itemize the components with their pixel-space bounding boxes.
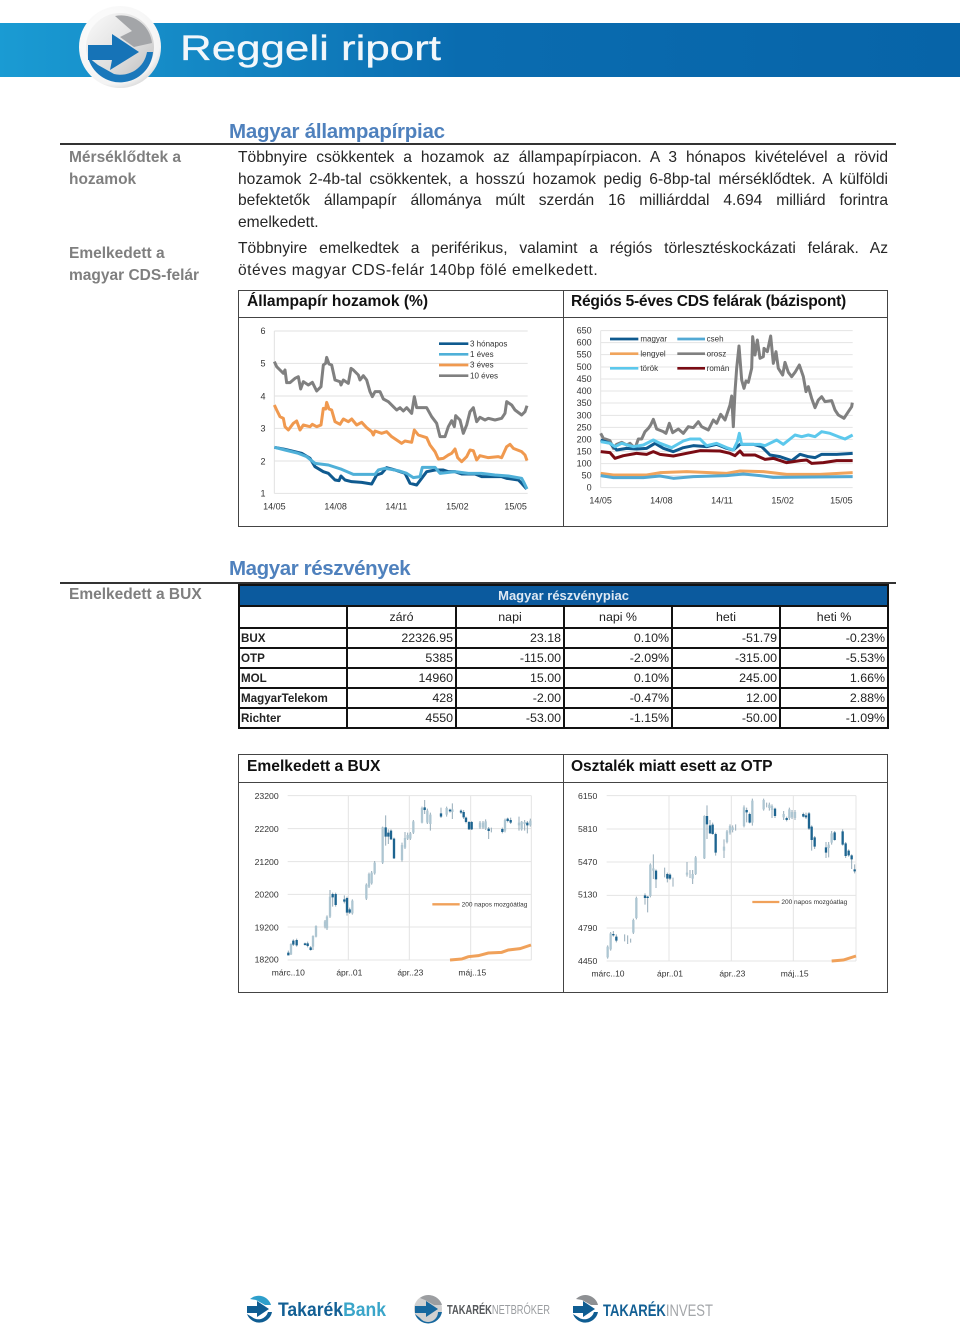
line chart: regional CDS spreads: 650 xyxy=(577,326,592,336)
table: Hungarian equity market: 15.00 xyxy=(530,671,561,685)
chart legend: yields: 10 éves xyxy=(470,371,498,380)
line chart: government bond yields: 14/08 xyxy=(324,502,347,512)
table: Hungarian equity market: -5.53% xyxy=(846,651,885,665)
heading: Magyar állampapírpiac: Magyar állampapírpiac xyxy=(229,120,445,143)
table: Hungarian equity market: 428 xyxy=(432,691,453,705)
line chart: regional CDS spreads: 400 xyxy=(577,386,592,396)
icon: main logo xyxy=(79,13,161,88)
line chart: regional CDS spreads xyxy=(576,326,854,506)
chart legend: yields: 3 hónapos xyxy=(470,339,507,348)
logo: TakarékBank xyxy=(247,1296,386,1323)
panel: stock chart frame xyxy=(238,754,888,993)
line chart: regional CDS spreads: 0 xyxy=(587,483,592,493)
candlestick chart: OTP xyxy=(578,791,856,978)
table: Hungarian equity market: -0.47% xyxy=(630,691,669,705)
table: Hungarian equity market: 0.10% xyxy=(634,671,669,685)
text block: CDS spreads: ötéves magyar CDS-felár 140bp fölé emelkedett. xyxy=(238,262,598,278)
table: Hungarian equity market: -1.15% xyxy=(630,711,669,725)
line chart: regional CDS spreads: 350 xyxy=(577,398,592,408)
candlestick chart: BUX: 21200 xyxy=(255,857,279,867)
candlestick chart: BUX: máj..15 xyxy=(458,967,487,977)
table: Hungarian equity market: heti % xyxy=(817,610,851,624)
table: Hungarian equity market: -315.00 xyxy=(735,651,777,665)
table: Hungarian equity market: 0.10% xyxy=(634,631,669,645)
chart legend: moving average: 200 napos mozgóatlag xyxy=(781,899,848,906)
chart legend: CDS: magyar xyxy=(640,335,667,344)
line chart: regional CDS spreads: 100 xyxy=(577,459,592,469)
banner title: Reggeli riport xyxy=(180,29,441,68)
line chart: government bond yields: 5 xyxy=(260,359,266,369)
line chart: government bond yields: 15/02 xyxy=(446,502,469,512)
line chart: regional CDS spreads: 200 xyxy=(577,434,592,444)
chart legend: yields: 1 éves xyxy=(470,350,494,359)
table: Hungarian equity market: napi % xyxy=(599,610,637,624)
line chart: government bond yields: 14/11 xyxy=(385,502,407,512)
table: Hungarian equity market: -115.00 xyxy=(520,651,561,665)
chart legend: yields: 3 éves xyxy=(470,361,494,370)
chart legend: yields xyxy=(439,339,507,380)
line chart: regional CDS spreads: 600 xyxy=(577,338,592,348)
line chart: regional CDS spreads: 15/05 xyxy=(830,496,853,506)
table: Hungarian equity market: -2.00 xyxy=(533,691,561,705)
chart legend: CDS xyxy=(610,335,729,373)
candlestick chart: OTP: 5810 xyxy=(578,824,597,834)
line chart: government bond yields: 15/05 xyxy=(504,502,527,512)
text block: government bonds: befektetők állampapír állománya múlt szerdán 16 milliárddal 4.694 milliárd forintra xyxy=(238,192,888,209)
candlestick chart: BUX: 19200 xyxy=(255,922,279,932)
table: Hungarian equity market: OTP xyxy=(241,652,265,664)
chart legend: CDS: orosz xyxy=(707,349,726,358)
candlestick chart: OTP: 4450 xyxy=(578,956,597,966)
side note: Emelkedett a BUX: Emelkedett a BUX xyxy=(69,586,202,603)
table: Hungarian equity market: BUX xyxy=(241,632,265,644)
table: Hungarian equity market: MagyarTelekom xyxy=(241,692,328,704)
table: Hungarian equity market xyxy=(238,584,889,729)
line chart: government bond yields: 1 xyxy=(260,489,266,499)
text block: government bonds: hozamok 2-4b-tal csökkentek, a hosszú hozamok pedig 6-8bp-tal mérséklődtek. A külföldi xyxy=(238,170,888,188)
line chart: regional CDS spreads: 550 xyxy=(577,350,592,360)
candlestick chart: BUX: 22200 xyxy=(255,824,279,834)
table: Hungarian equity market: 5385 xyxy=(425,651,453,665)
table: Hungarian equity market: napi xyxy=(498,610,522,624)
line chart: government bond yields: 14/05 xyxy=(263,502,286,512)
chart legend: CDS: cseh xyxy=(707,335,724,344)
text block: government bonds: emelkedett. xyxy=(238,214,319,230)
side note: Mérséklődtek a hozamok xyxy=(69,149,182,188)
table: Hungarian equity market: heti xyxy=(716,610,736,624)
candlestick chart: BUX: 23200 xyxy=(255,791,279,801)
candlestick chart: BUX xyxy=(255,791,532,977)
line chart: government bond yields: 3 xyxy=(260,424,266,434)
text block: government bonds: Többnyire csökkentek a hozamok az állampapírpiacon. A 3 hónapos kivételével a rövid xyxy=(238,149,888,166)
candlestick chart: OTP: 6150 xyxy=(578,791,597,801)
line chart: regional CDS spreads: 50 xyxy=(582,471,592,481)
line chart: regional CDS spreads: 14/08 xyxy=(650,496,673,506)
header banner xyxy=(0,13,960,88)
candlestick chart: OTP: máj..15 xyxy=(781,968,809,978)
logo: TakarékNetBróker xyxy=(414,1295,550,1324)
table: Hungarian equity market: 23.18 xyxy=(530,631,561,645)
line chart: regional CDS spreads: 300 xyxy=(577,410,592,420)
table: Hungarian equity market: 4550 xyxy=(425,711,453,725)
side note: Emelkedett a magyar CDS-felár: Emelkedett a xyxy=(69,245,165,262)
chart heading: Állampapír hozamok: Állampapír hozamok (%) xyxy=(247,293,428,310)
line chart: regional CDS spreads: 500 xyxy=(577,362,592,372)
table: Hungarian equity market: MOL xyxy=(241,672,267,684)
candlestick chart: BUX: 20200 xyxy=(255,890,279,900)
line chart: regional CDS spreads: 14/11 xyxy=(711,496,733,506)
side note: Mérséklődtek a hozamok: Mérséklődtek a xyxy=(69,149,181,166)
chart heading: Osztalék miatt esett az OTP: Osztalék miatt esett az OTP xyxy=(571,758,772,775)
table: Hungarian equity market: -53.00 xyxy=(526,711,561,725)
candlestick chart: OTP: ápr..01 xyxy=(657,968,683,978)
candlestick chart: BUX: 18200 xyxy=(255,955,279,965)
table: Hungarian equity market: 12.00 xyxy=(746,691,777,705)
heading: Magyar részvények: Magyar részvények xyxy=(229,557,410,580)
chart legend: moving average: 200 napos mozgóátlag xyxy=(462,902,528,909)
panel: bond and CDS chart frame xyxy=(238,290,888,527)
line chart: regional CDS spreads: 14/05 xyxy=(589,496,612,506)
table: Hungarian equity market: -50.00 xyxy=(742,711,777,725)
table: Hungarian equity market: Magyar részvénypiac xyxy=(498,588,629,602)
table: Hungarian equity market: -0.23% xyxy=(846,631,885,645)
text block: CDS spreads: Többnyire emelkedtek a periférikus, valamint a régiós törlesztéskockázati felárak. Az xyxy=(238,240,888,257)
line chart: government bond yields: 2 xyxy=(260,456,266,466)
candlestick chart: OTP: 5470 xyxy=(578,857,597,867)
table: Hungarian equity market: 14960 xyxy=(419,671,453,685)
table: Hungarian equity market: -1.09% xyxy=(846,711,885,725)
candlestick chart: BUX: ápr..01 xyxy=(336,967,363,977)
chart legend: CDS: lengyel xyxy=(640,349,666,358)
line chart: regional CDS spreads: 15/02 xyxy=(771,496,794,506)
logo: TakarékInvest xyxy=(573,1295,713,1323)
candlestick chart: BUX: ápr..23 xyxy=(397,967,424,977)
table: Hungarian equity market: 1.66% xyxy=(850,671,885,685)
line chart: regional CDS spreads: 250 xyxy=(577,422,592,432)
candlestick chart: OTP: márc..10 xyxy=(591,968,625,978)
line chart: regional CDS spreads: 450 xyxy=(577,374,592,384)
table: Hungarian equity market: -2.09% xyxy=(630,651,669,665)
table: Hungarian equity market: 22326.95 xyxy=(401,631,453,645)
text block: government bonds xyxy=(238,149,888,230)
candlestick chart: OTP: 5130 xyxy=(578,890,597,900)
table: Hungarian equity market: záró xyxy=(389,610,414,624)
candlestick chart: BUX: márc..10 xyxy=(272,967,305,977)
line chart: government bond yields: 6 xyxy=(260,326,266,336)
table: Hungarian equity market: 2.88% xyxy=(850,691,885,705)
chart heading: Emelkedett a BUX: Emelkedett a BUX xyxy=(247,758,380,775)
text block: CDS spreads xyxy=(238,240,888,278)
chart legend: CDS: török xyxy=(640,364,659,373)
logo: TakarékBank: TakarékBank xyxy=(278,1300,386,1321)
banner band xyxy=(0,23,960,77)
chart legend: moving average xyxy=(752,899,848,906)
side note: Emelkedett a magyar CDS-felár: magyar CDS-felár xyxy=(69,267,199,284)
side note: Mérséklődtek a hozamok: hozamok xyxy=(69,171,136,188)
table: Hungarian equity market: 245.00 xyxy=(739,671,777,685)
line chart: regional CDS spreads: 150 xyxy=(577,446,592,456)
line chart: government bond yields: 4 xyxy=(260,391,266,401)
chart legend: moving average xyxy=(432,902,528,909)
candlestick chart: OTP: 4790 xyxy=(578,923,597,933)
candlestick chart: OTP: ápr..23 xyxy=(719,968,746,978)
table: Hungarian equity market: Richter xyxy=(241,712,281,724)
table: Hungarian equity market: -51.79 xyxy=(742,631,777,645)
side note: Emelkedett a magyar CDS-felár xyxy=(69,245,199,284)
chart heading: Régiós CDS: Régiós 5-éves CDS felárak (bázispont) xyxy=(571,293,846,310)
line chart: government bond yields xyxy=(260,326,528,512)
footer logos xyxy=(247,1295,713,1324)
chart legend: CDS: román xyxy=(707,364,729,373)
